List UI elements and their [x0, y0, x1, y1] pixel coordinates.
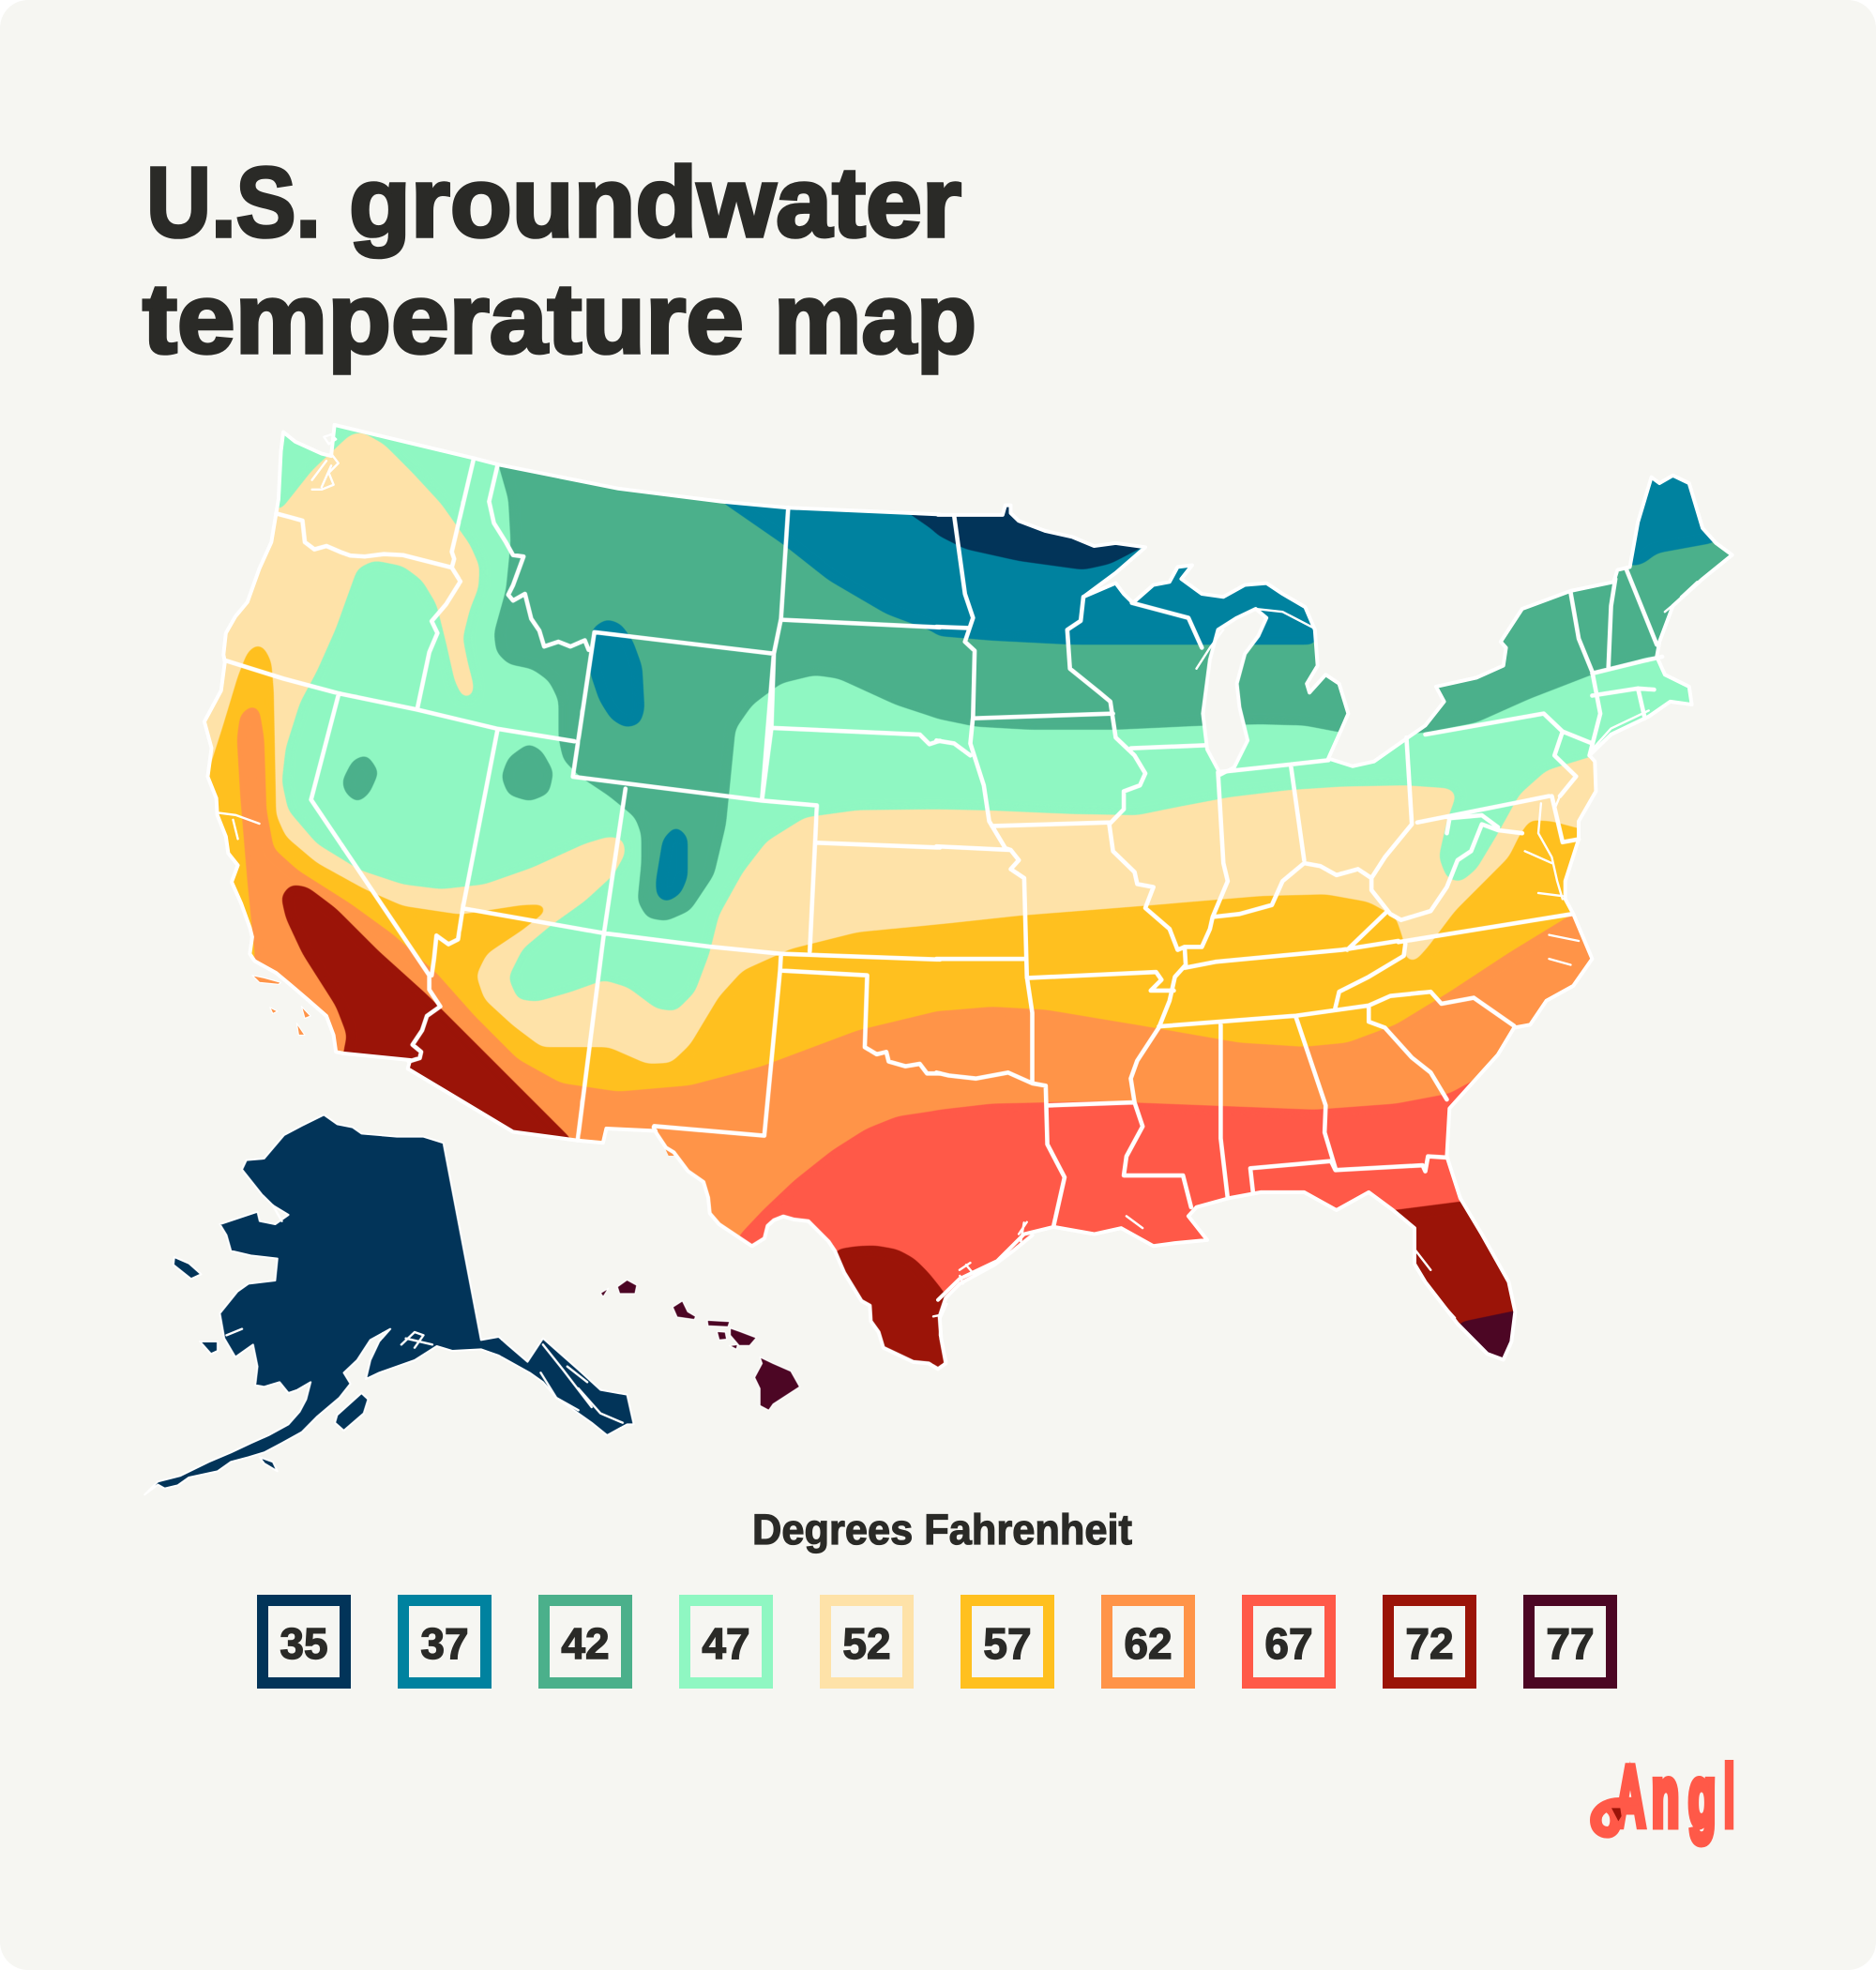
Angi logo: g: [1688, 1750, 1716, 1844]
Alaska: [144, 1114, 634, 1494]
legend item 72: [1388, 1600, 1471, 1683]
legend item 35: 35: [280, 1619, 328, 1668]
legend item 35: [263, 1600, 345, 1683]
text: i: [1724, 1750, 1734, 1844]
zone: 57 degrees: [210, 645, 1578, 1092]
legend item 62: 62: [1124, 1619, 1172, 1668]
legend item 52: 52: [842, 1619, 891, 1668]
legend item 42: 42: [561, 1619, 610, 1668]
state borders: [225, 459, 1662, 1225]
lake michigan: [1203, 609, 1266, 775]
zone: 42 degrees: [341, 450, 1746, 921]
title: map: [774, 264, 976, 374]
Alaska islands: [174, 1205, 623, 1471]
zone: 47 degrees: [274, 403, 1746, 1011]
channel islands: [252, 976, 310, 1035]
zone: 52 degrees base: [206, 433, 1595, 1156]
zone: 62 degrees: [236, 707, 1590, 1236]
legend item 52: [825, 1600, 908, 1683]
Angi logo: n: [1652, 1750, 1679, 1844]
legend item 57: [966, 1600, 1049, 1683]
legend item 47: [685, 1600, 767, 1683]
contiguous US temperature map: [203, 423, 1733, 1371]
coastline outline: [204, 425, 1732, 1369]
legend item 67: [1248, 1600, 1330, 1683]
temperature zones: [206, 428, 1730, 1367]
legend item 37: 37: [420, 1619, 469, 1668]
legend item 72: 72: [1405, 1619, 1454, 1668]
legend item 67: 67: [1264, 1619, 1313, 1668]
legend item 47: 47: [702, 1619, 750, 1668]
legend item 57: 57: [983, 1619, 1032, 1668]
Angi logo: A: [1615, 1750, 1645, 1844]
title: temperature: [143, 264, 744, 374]
legend item 42: [544, 1600, 627, 1683]
title: U.S.: [146, 147, 321, 258]
Hawaii: [600, 1280, 800, 1410]
title: [143, 147, 976, 374]
zone: 35 degrees: [912, 507, 1141, 569]
title: groundwater: [349, 147, 961, 258]
legend item 77: 77: [1546, 1619, 1595, 1668]
zone: 77 degrees: [1460, 1311, 1514, 1357]
zone: 67 degrees: [739, 1081, 1471, 1296]
zone: 72 degrees: [281, 886, 1514, 1367]
Angi logo: [1596, 1750, 1734, 1844]
legend: [263, 1600, 1611, 1683]
legend item 77: [1529, 1600, 1611, 1683]
zone: 37 degrees: [590, 450, 1746, 902]
legend item 62: [1107, 1600, 1189, 1683]
legend item 37: [403, 1600, 486, 1683]
legend heading: Degrees Fahrenheit: [752, 1506, 1132, 1553]
